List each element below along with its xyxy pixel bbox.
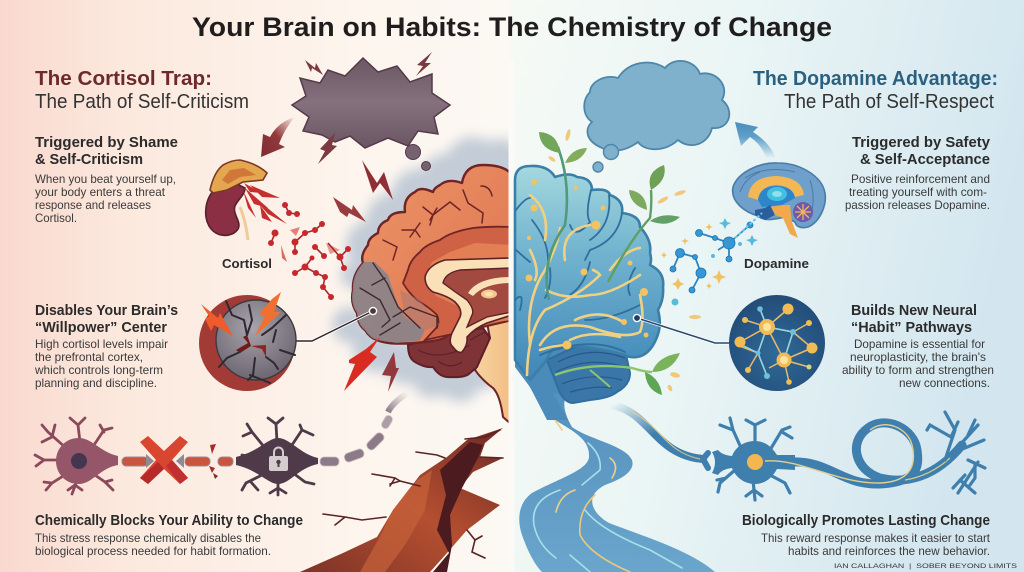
thought cloud: calm bbox=[584, 61, 729, 172]
dopamine molecules bbox=[670, 213, 762, 293]
text block: chemically blocks: Chemically Blocks Your Ability to Change bbox=[35, 512, 303, 529]
icon: small healthy brain bbox=[733, 163, 825, 238]
heading: the cortisol trap bbox=[35, 68, 249, 113]
icon: red X bbox=[140, 436, 188, 484]
limbic core bbox=[443, 268, 512, 327]
cracks in prefrontal bbox=[360, 263, 437, 335]
heading: the cortisol trap: The Path of Self-Criticism bbox=[35, 91, 249, 113]
arrow: stress to adrenal bbox=[261, 117, 295, 157]
text block: triggered by safety: passion releases Dopamine. bbox=[845, 198, 990, 212]
text block: builds new pathways: Dopamine is essential for bbox=[854, 337, 985, 351]
brain: stressed cortisol side bbox=[352, 165, 512, 425]
broken chain fading out bbox=[320, 393, 408, 466]
sprout: right bbox=[608, 165, 680, 282]
text block: disables willpower center: planning and discipline. bbox=[35, 376, 157, 390]
text block: promotes lasting change bbox=[742, 512, 991, 558]
text block: disables willpower center bbox=[34, 302, 178, 390]
text block: builds new pathways bbox=[842, 302, 994, 390]
panel: dopamine text column bbox=[742, 68, 1017, 570]
sprout: top left bbox=[539, 132, 587, 300]
text block: builds new pathways: new connections. bbox=[899, 376, 990, 390]
cerebrum bbox=[352, 165, 512, 344]
icon: neural network sphere bbox=[729, 295, 825, 391]
text block: triggered by safety: Triggered by Safety bbox=[852, 134, 991, 151]
arrow: dopamine to thought cloud bbox=[735, 122, 775, 158]
text block: triggered by safety: & Self-Acceptance bbox=[860, 151, 990, 168]
text block: triggered by shame: your body enters a threat bbox=[35, 185, 166, 199]
inner cortex band bbox=[403, 227, 512, 340]
text block: triggered by shame bbox=[35, 134, 178, 225]
text block: triggered by safety bbox=[845, 134, 991, 212]
gold petals bbox=[548, 129, 701, 392]
text block: chemically blocks bbox=[35, 512, 303, 558]
cortisol molecules bbox=[268, 202, 351, 300]
text block: triggered by shame: response and releases bbox=[35, 198, 151, 212]
lightning bolts: below brain bbox=[344, 337, 399, 392]
golden pathways bbox=[527, 195, 642, 375]
text block: disables willpower center: Disables Your Brain’s bbox=[35, 302, 178, 319]
text block: chemically blocks: biological process needed for habit formation. bbox=[35, 544, 271, 558]
brain stem bbox=[474, 322, 508, 424]
heading: the dopamine advantage: The Dopamine Advantage: bbox=[753, 68, 998, 90]
text block: builds new pathways: Builds New Neural bbox=[851, 302, 977, 319]
brain: dopamine side bbox=[515, 132, 680, 420]
text block: disables willpower center: “Willpower” Center bbox=[35, 319, 167, 336]
text block: promotes lasting change: habits and reinforces the new behavior. bbox=[788, 544, 990, 558]
text block: builds new pathways: neuroplasticity, the brain's bbox=[850, 350, 986, 364]
dark folds bbox=[515, 190, 640, 355]
divider glow bbox=[508, 60, 514, 572]
heading: the dopamine advantage bbox=[753, 68, 998, 113]
callout connector: dopamine bbox=[633, 314, 730, 343]
text block: disables willpower center: the prefrontal cortex, bbox=[35, 350, 143, 364]
lightning bolts: around burst and brain bbox=[305, 52, 432, 222]
sparkles bbox=[661, 218, 758, 306]
cerebellum bbox=[547, 340, 630, 403]
background: left half bbox=[0, 0, 510, 572]
text block: triggered by safety: Positive reinforcement and bbox=[851, 172, 990, 186]
text block: promotes lasting change: This reward response makes it easier to start bbox=[761, 531, 991, 545]
crack in ground bbox=[300, 428, 503, 572]
sprout: bottom bbox=[555, 353, 680, 395]
icon: adrenal gland and kidney bbox=[206, 160, 267, 240]
neuron: locked bbox=[236, 418, 318, 495]
text block: builds new pathways: “Habit” Pathways bbox=[851, 319, 972, 336]
icon: cracked prefrontal sphere bbox=[199, 292, 296, 391]
signal blocked link bbox=[122, 444, 233, 479]
text block: triggered by safety: treating yourself with com- bbox=[849, 185, 987, 199]
neuron: growing with loop bbox=[712, 412, 985, 500]
smoke cloud behind stressed brain bbox=[332, 137, 526, 402]
text block: triggered by shame: & Self-Criticism bbox=[35, 151, 143, 168]
credit line: IAN CALLAGHAN | SOBER BEYOND LIMITS bbox=[834, 564, 1017, 570]
cerebellum bbox=[408, 328, 490, 377]
neuron: incoming axon bbox=[612, 405, 708, 468]
text block: disables willpower center: High cortisol levels impair bbox=[35, 337, 168, 351]
title: Your Brain on Habits: The Chemistry of Change bbox=[192, 12, 832, 42]
text block: triggered by shame: When you beat yourself up, bbox=[35, 172, 176, 186]
text block: builds new pathways: ability to form and strengthen bbox=[842, 363, 994, 377]
text block: chemically blocks: This stress response chemically disables the bbox=[35, 531, 261, 545]
river streaks bbox=[525, 360, 682, 572]
text block: disables willpower center: which controls long-term bbox=[34, 363, 163, 377]
text block: promotes lasting change: Biologically Promotes Lasting Change bbox=[742, 512, 990, 529]
thought burst: stress bbox=[292, 58, 450, 170]
panel: cortisol text column bbox=[34, 68, 303, 558]
callout connector: cortisol bbox=[296, 307, 377, 341]
stem bbox=[515, 270, 600, 420]
label: cortisol: Cortisol bbox=[222, 256, 272, 271]
text block: triggered by shame: Cortisol. bbox=[35, 211, 77, 225]
prefrontal grey zone bbox=[352, 262, 425, 343]
river flowing from right brain bbox=[515, 330, 715, 572]
cortisol spray shards bbox=[243, 183, 340, 262]
cerebrum bbox=[515, 166, 663, 380]
background: right half bbox=[510, 0, 1024, 572]
heading: the cortisol trap: The Cortisol Trap: bbox=[35, 68, 212, 90]
label: dopamine: Dopamine bbox=[744, 256, 809, 271]
neuron: blocked bbox=[35, 418, 118, 494]
heading: the dopamine advantage: The Path of Self-Respect bbox=[784, 91, 994, 113]
text block: triggered by shame: Triggered by Shame bbox=[35, 134, 178, 151]
cream band bbox=[425, 258, 512, 352]
sulci lines bbox=[383, 186, 492, 260]
